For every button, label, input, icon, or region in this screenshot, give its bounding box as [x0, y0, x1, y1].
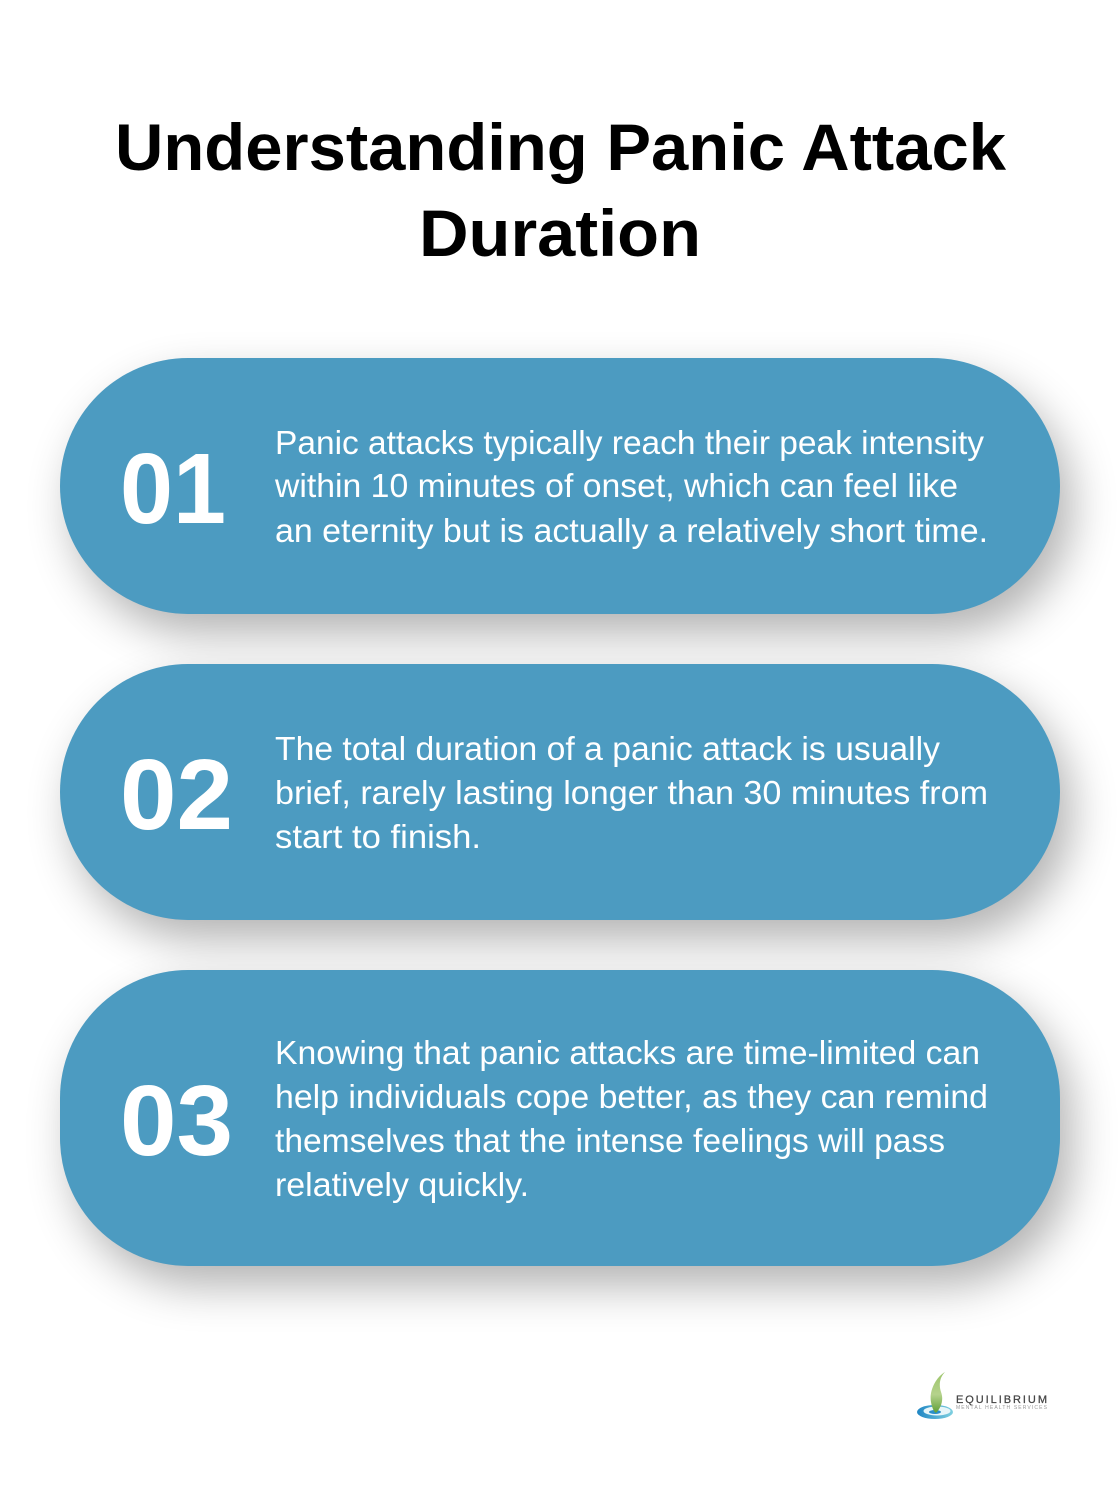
panel: step 02	[60, 664, 1060, 920]
text: step 01 description: within 10 minutes of onset, which can feel like	[274, 467, 958, 504]
text: step 02 description: start to finish.	[275, 818, 481, 855]
panel: step 01	[60, 358, 1060, 614]
logo wordmark: EQUILIBRIUM	[956, 1394, 1047, 1406]
text: step 01 description: Panic attacks typically reach their peak intensity	[275, 424, 984, 461]
logo: Equilibrium	[917, 1372, 1048, 1419]
text: step 02 description	[275, 730, 988, 855]
title: Understanding Panic Attack	[115, 110, 1006, 184]
title	[115, 110, 1006, 270]
number 02: 02	[120, 739, 233, 851]
text: step 03 description: themselves that the intense feelings will pass	[275, 1122, 945, 1159]
icon: ripple	[917, 1405, 953, 1419]
panel: step 03	[60, 970, 1060, 1266]
text: step 01 description	[274, 424, 988, 549]
title: Duration	[419, 196, 701, 270]
text: step 02 description: brief, rarely lasting longer than 30 minutes from	[275, 774, 988, 811]
text: step 02 description: The total duration of a panic attack is usually	[275, 730, 941, 767]
text: step 01 description: an eternity but is actually a relatively short time.	[275, 512, 988, 549]
logo wordmark: MENTAL HEALTH SERVICES	[956, 1405, 1048, 1411]
text: step 03 description: help individuals cope better, as they can remind	[275, 1078, 988, 1115]
text: step 03 description: Knowing that panic attacks are time-limited can	[275, 1034, 980, 1071]
number 01: 01	[120, 433, 226, 545]
text: step 03 description: relatively quickly.	[275, 1166, 529, 1203]
number 03: 03	[120, 1065, 233, 1177]
text: step 03 description	[275, 1034, 988, 1203]
icon: leaf	[931, 1372, 945, 1413]
